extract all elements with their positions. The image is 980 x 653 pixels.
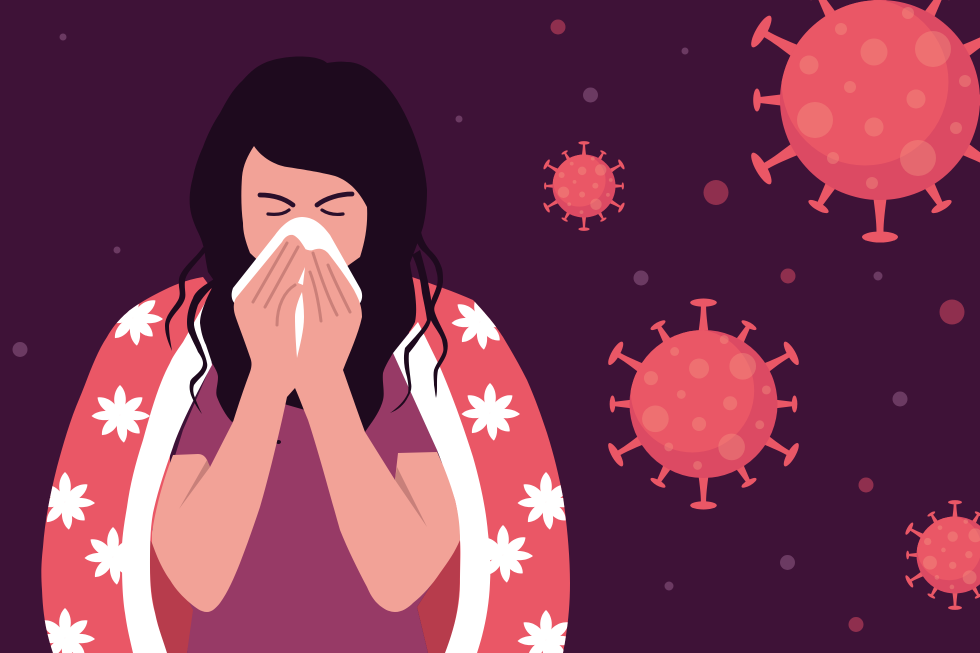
left arm and hand <box>152 235 306 612</box>
face <box>241 146 367 300</box>
finger lines <box>253 243 350 325</box>
virus: small bottom right <box>904 500 980 610</box>
small hair tip <box>276 440 281 444</box>
coat: left side <box>41 277 220 653</box>
coat: right side <box>400 277 570 653</box>
arm creases <box>179 460 427 527</box>
shirt <box>152 353 460 653</box>
woman <box>36 57 576 653</box>
virus: medium centre <box>606 299 801 509</box>
right arm and hand <box>295 249 460 612</box>
hair strand: inner right <box>390 250 432 413</box>
coat flowers: left <box>36 288 163 653</box>
tissue between hands <box>295 267 305 358</box>
closed eyes <box>268 210 343 214</box>
coat flowers: right <box>451 292 576 653</box>
coat lapel: left <box>122 303 212 653</box>
virus: large top right <box>748 0 980 242</box>
eyebrows <box>260 194 352 205</box>
hair strand: inner left <box>187 279 216 414</box>
coat lapel: right <box>393 322 490 653</box>
hair strand: far right <box>415 232 448 398</box>
hair <box>190 57 427 432</box>
hair strand: far left <box>165 247 207 351</box>
virus: small upper middle <box>542 141 626 231</box>
tissue <box>232 217 362 320</box>
coat lining: dark red <box>150 540 460 653</box>
